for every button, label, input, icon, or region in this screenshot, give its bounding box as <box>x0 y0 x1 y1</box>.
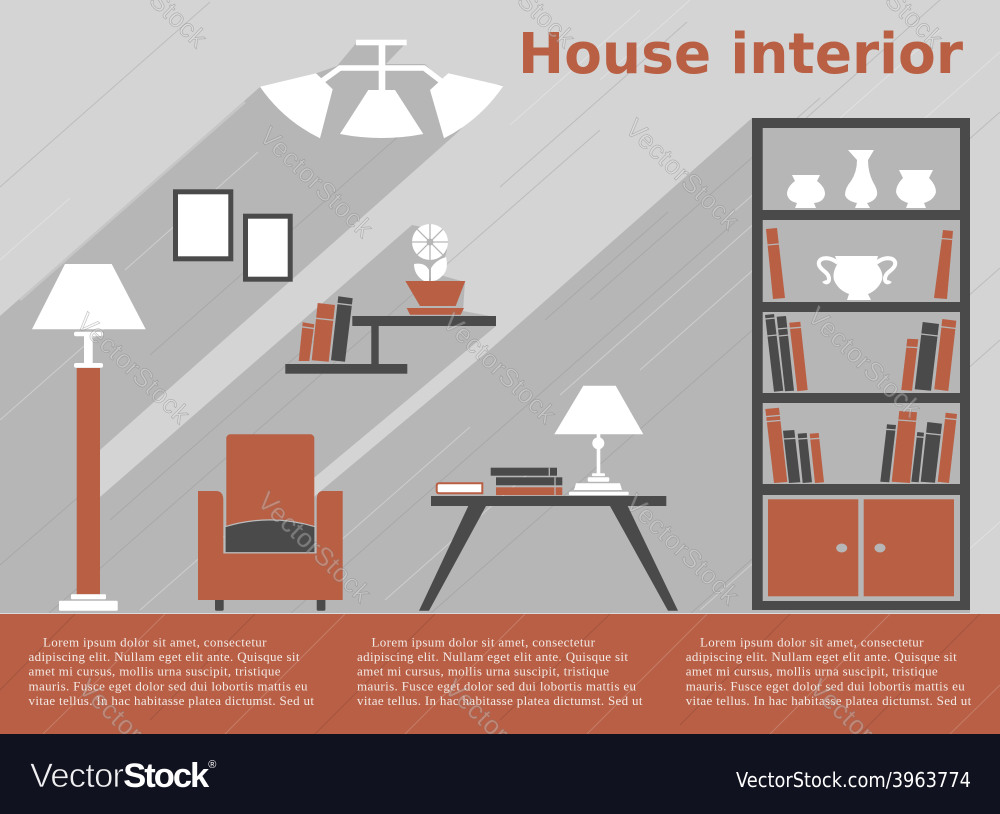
shelf books <box>299 296 353 362</box>
footer bar <box>0 734 1000 814</box>
watermarks: VectorStock <box>71 307 197 430</box>
text column 3: amet mi cursus, mollis urna suscipit, tristique <box>686 664 938 679</box>
watermarks: VectorStock <box>437 307 563 430</box>
title: House interior <box>518 22 963 87</box>
armchair <box>198 434 343 611</box>
books, second shelf <box>766 228 953 299</box>
bookcase frame <box>752 118 970 610</box>
watermarks: VectorStock <box>804 673 930 796</box>
watermarks: VectorStock <box>802 301 928 424</box>
text column 3: vitae tellus. In hac habitasse platea dictumst. Sed ut <box>686 693 972 708</box>
footer url: VectorStock.com/3963774 <box>736 768 971 792</box>
white urn <box>819 256 895 300</box>
watermarks: VectorStock <box>439 673 565 796</box>
lit wall area with long shadow edges <box>0 0 1000 614</box>
text column 2: mauris. Fusce eget dolor sed dui lobortis mattis eu <box>357 678 636 693</box>
shadow edge sliver <box>20 102 245 300</box>
watermarks: VectorStock <box>73 673 199 796</box>
text column 2 <box>357 634 643 708</box>
text column 3: mauris. Fusce eget dolor sed dui lobortis mattis eu <box>686 678 965 693</box>
cabinet doors <box>768 499 954 596</box>
bookcase <box>752 118 970 610</box>
ceiling chandelier <box>260 40 503 138</box>
books, fourth shelf <box>765 408 957 483</box>
text column 2: adipiscing elit. Nullam eget elit ante. Quisque sit <box>357 649 628 664</box>
picture frames <box>176 192 290 279</box>
text column 1: vitae tellus. In hac habitasse platea dictumst. Sed ut <box>28 693 314 708</box>
white vases <box>787 150 936 208</box>
text column 1 <box>28 634 314 708</box>
watermarks: VectorStock <box>620 113 746 236</box>
potted flower <box>405 224 465 315</box>
text column 1: mauris. Fusce eget dolor sed dui lobortis mattis eu <box>28 678 308 693</box>
shelf compartments <box>763 128 960 601</box>
diagonal scratch lines <box>0 0 1000 614</box>
text column 3 <box>686 634 972 708</box>
footer logo word: ® <box>208 759 216 771</box>
floor band <box>0 613 1000 734</box>
watermarks: VectorStock <box>252 486 378 609</box>
text column 1: adipiscing elit. Nullam eget elit ante. Quisque sit <box>28 649 300 664</box>
watermarks: VectorStock <box>620 488 746 611</box>
floor lamp <box>32 264 146 611</box>
text column 2: Lorem ipsum dolor sit amet, consectetur <box>372 634 596 650</box>
text column 1: amet mi cursus, mollis urna suscipit, tristique <box>28 664 281 679</box>
coffee table <box>419 496 678 611</box>
footer logo word: VectorStock <box>30 757 209 795</box>
text column 3: Lorem ipsum dolor sit amet, consectetur <box>700 634 924 650</box>
text column 3: adipiscing elit. Nullam eget elit ante. Quisque sit <box>686 649 957 664</box>
text column 1: Lorem ipsum dolor sit amet, consectetur <box>43 634 267 650</box>
watermarks: VectorStock <box>254 121 380 244</box>
table lamp <box>554 386 643 495</box>
wall shelves <box>285 316 496 374</box>
text column 2: amet mi cursus, mollis urna suscipit, tristique <box>357 664 609 679</box>
books, third shelf <box>765 314 956 392</box>
table books <box>437 468 562 495</box>
wall in shadow <box>0 0 1000 614</box>
text column 2: vitae tellus. In hac habitasse platea dictumst. Sed ut <box>357 693 643 708</box>
